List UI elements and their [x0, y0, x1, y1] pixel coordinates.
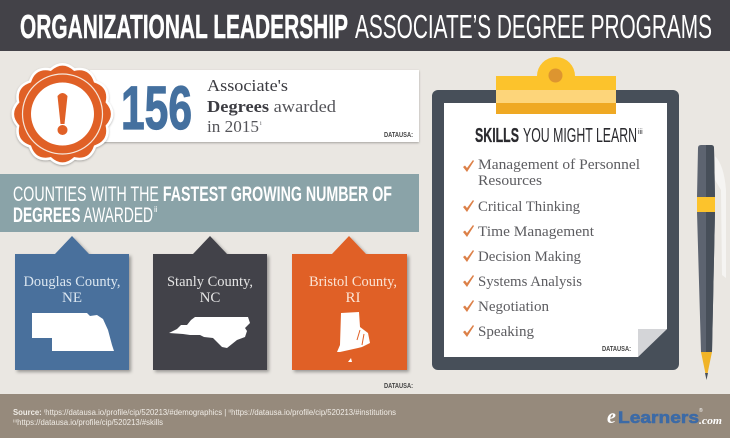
paper fold: [638, 329, 667, 357]
skills list: Resources: [478, 173, 542, 189]
panel: Stanly County, NC: [153, 236, 267, 370]
banner: counties heading: ii: [154, 205, 158, 214]
stat description: Associate's: [207, 76, 288, 95]
skills list: Time Management: [478, 224, 594, 240]
logo: eLearners.com: .com: [699, 416, 722, 427]
panel: Douglas County, NE: [15, 236, 129, 370]
skills list: Critical Thinking: [478, 199, 580, 215]
panel: Douglas County, NE: NE: [62, 290, 82, 306]
banner: counties heading: [0, 174, 419, 232]
stat: 156: 156: [121, 74, 192, 142]
icon: exclamation badge: [13, 64, 112, 164]
logo: eLearners.com: [607, 406, 722, 428]
stat description: Degrees awarded: [207, 97, 337, 116]
sources text: Source: ⁱhttps://datausa.io/profile/cip/520213/#demographics | ⁱⁱhttps://datausa.io/profile/cip/520213/#institutions: [13, 408, 396, 417]
map: Nebraska: [32, 313, 114, 351]
check marks: [463, 160, 474, 337]
map: Rhode Island: [337, 312, 370, 352]
logo: eLearners.com: Learners: [618, 408, 699, 427]
title bar: ORGANIZATIONAL LEADERSHIP: [20, 8, 348, 45]
logo: eLearners.com: ®: [699, 407, 703, 414]
map: North Carolina: [169, 317, 250, 348]
panel: Bristol County, RI: RI: [346, 290, 361, 306]
source: DATAUSA: DATAUSA:: [602, 346, 631, 353]
skills list: Systems Analysis: [478, 274, 582, 290]
skills heading: YOU MIGHT LEARN: [523, 125, 637, 147]
panel: degrees awarded card: [90, 70, 419, 142]
logo: eLearners.com: e: [607, 406, 616, 428]
banner: counties heading: COUNTIES WITH THE FASTEST GROWING NUMBER OF: [13, 183, 392, 206]
panel: skills clipboard: [432, 57, 679, 370]
skills list: Speaking: [478, 324, 534, 340]
skills heading: SKILLS: [475, 125, 519, 147]
footer: [0, 394, 730, 438]
icon: pen: [697, 145, 726, 380]
source: DATAUSA: DATAUSA:: [384, 383, 413, 390]
sources text: [13, 408, 396, 427]
panel: Stanly County, NC: Stanly County,: [167, 274, 253, 290]
skills list: Management of Personnel: [478, 157, 640, 173]
panel: Douglas County, NE: Douglas County,: [24, 274, 120, 290]
panel: Stanly County, NC: NC: [200, 290, 220, 306]
skills list: Negotiation: [478, 299, 550, 315]
panel: Bristol County, RI: [292, 236, 407, 370]
panel: Bristol County, RI: Bristol County,: [309, 274, 397, 290]
stat description: in 2015: [207, 117, 259, 136]
skills heading: [475, 125, 643, 147]
banner: counties heading: DEGREES AWARDED: [13, 204, 153, 227]
skills list: Decision Making: [478, 249, 581, 265]
source: DATAUSA: DATAUSA:: [384, 132, 413, 139]
stat description: [207, 76, 337, 136]
skills heading: iii: [638, 129, 643, 136]
sources text: ⁱⁱⁱhttps://datausa.io/profile/cip/520213/#skills: [13, 418, 163, 427]
clip: [496, 57, 616, 114]
title bar: [0, 0, 730, 51]
stat description: i: [260, 121, 262, 127]
skills list: [478, 157, 640, 340]
